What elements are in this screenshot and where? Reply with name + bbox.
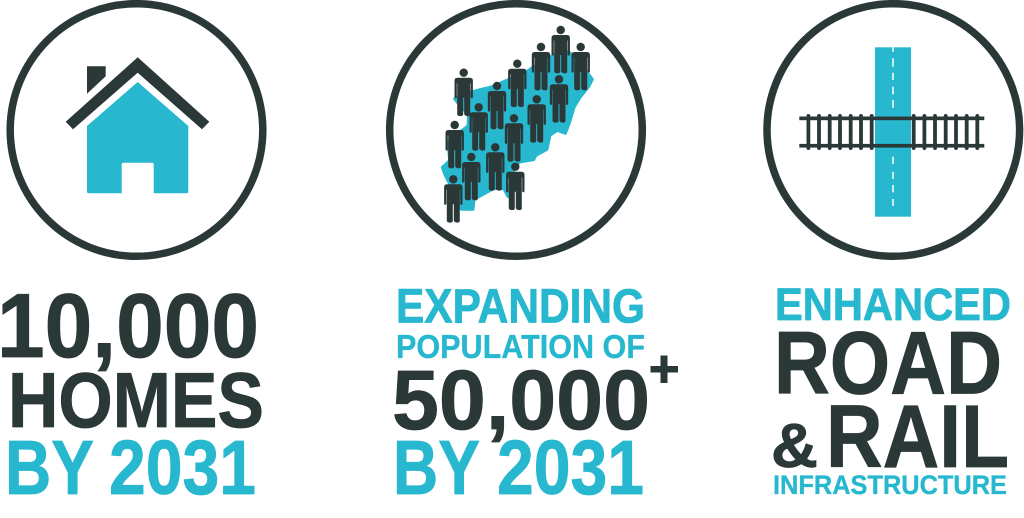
railway <box>799 114 984 150</box>
text: population of: POPULATION OF <box>396 329 645 366</box>
ampersand: & <box>771 412 818 481</box>
heading: by 2031 <box>5 425 256 511</box>
text: infrastructure: INFRASTRUCTURE <box>773 470 1007 500</box>
icon: house in circle <box>10 4 263 256</box>
icon: road and rail in circle <box>767 4 1020 256</box>
panel: infrastructure <box>767 4 1020 500</box>
heading: homes: HOMES <box>8 356 264 444</box>
icon: people on map in circle <box>390 4 642 256</box>
heading: by 2031 <box>393 425 644 511</box>
plus sign <box>650 356 678 383</box>
road <box>875 47 911 217</box>
heading: by 2031: BY <box>5 425 94 511</box>
panel: homes <box>0 4 264 511</box>
heading: 50,000: 50,000 <box>392 353 650 447</box>
heading: expanding: EXPANDING <box>396 280 645 333</box>
heading: by 2031: BY <box>393 425 480 511</box>
heading: enhanced: ENHANCED <box>775 279 1011 330</box>
heading: by 2031: 2031 <box>109 425 256 511</box>
heading: 10,000: 10,000 <box>0 276 259 377</box>
panel: population <box>390 4 678 511</box>
heading: by 2031: 2031 <box>497 425 644 511</box>
